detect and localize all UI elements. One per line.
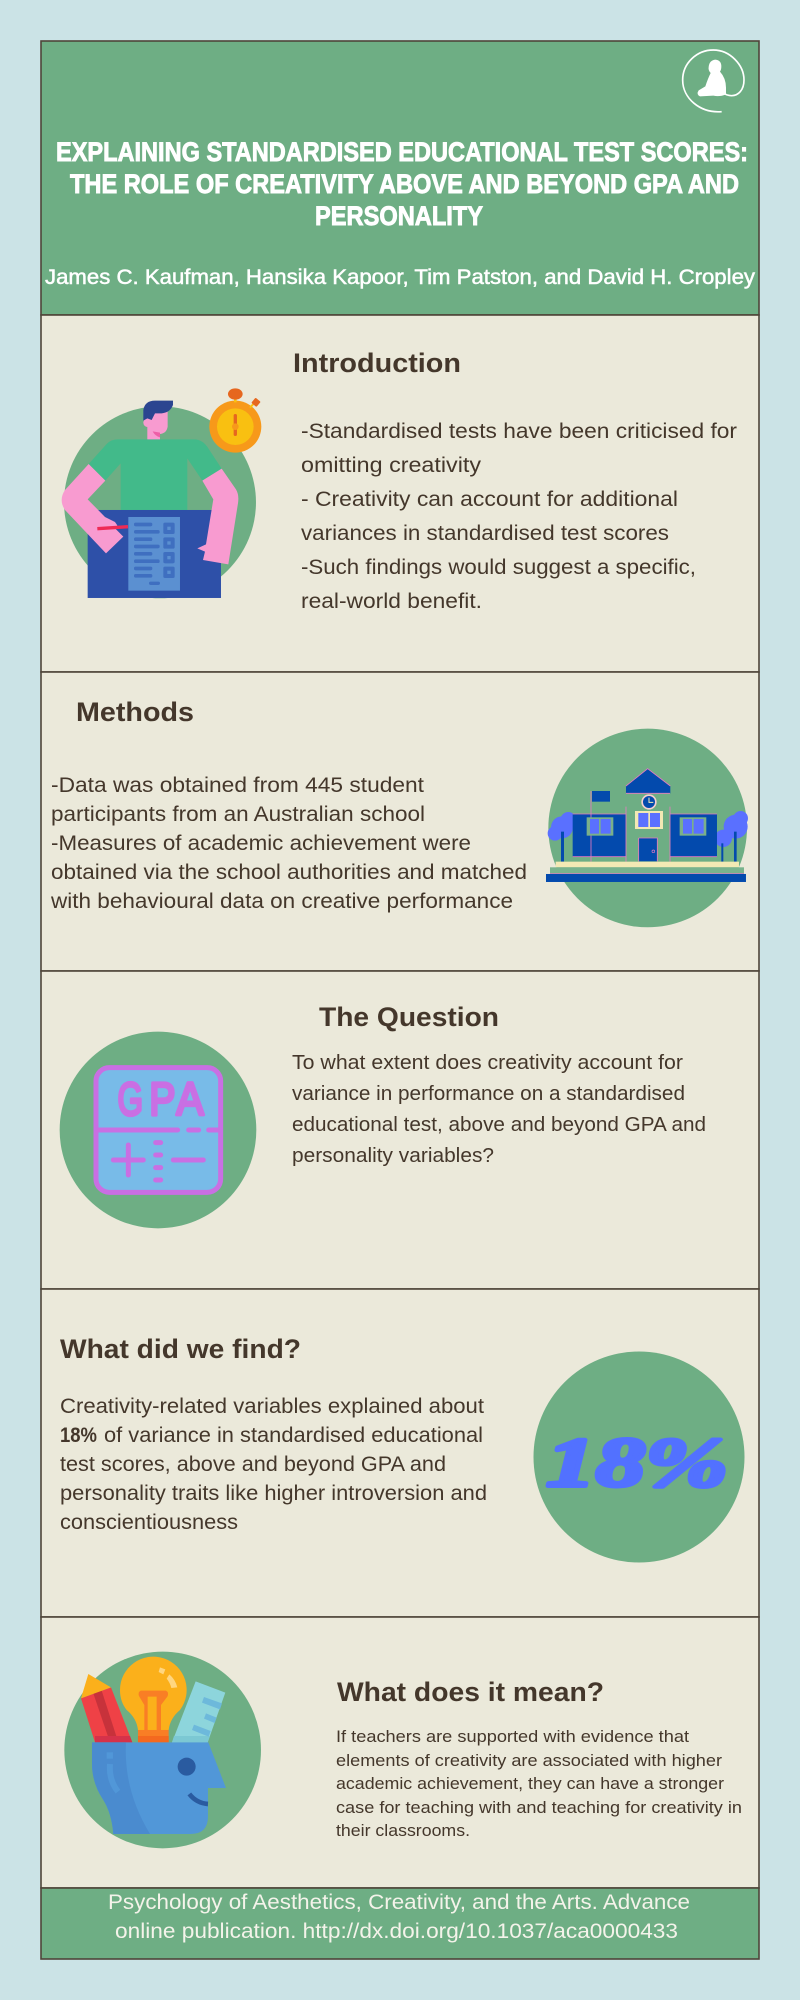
text block: methods: -Data was obtained from 445 student: [51, 774, 424, 797]
icon: school building: [546, 729, 748, 927]
text block: methods: with behavioural data on creative performance: [50, 890, 513, 913]
panel: the question: [41, 971, 759, 1289]
text block: implications: If teachers are supported with evidence that: [336, 1727, 689, 1746]
text block: findings: conscientiousness: [60, 1511, 238, 1534]
title: [56, 137, 748, 231]
panel: what does it mean: [41, 1617, 759, 1888]
text block: findings: of variance in standardised educational: [104, 1424, 483, 1447]
icon: GPA calculator: A: [176, 1073, 204, 1125]
text block: findings: 18%: [60, 1424, 97, 1447]
heading: what does it mean: What does it mean?: [337, 1677, 604, 1707]
text block: citation: [108, 1891, 690, 1943]
text block: introduction points: -Such findings would suggest a specific,: [301, 556, 696, 579]
text block: research question: educational test, above and beyond GPA and: [292, 1114, 706, 1136]
text block: implications: case for teaching with and teaching for creativity in: [336, 1798, 742, 1817]
authors: James C. Kaufman, Hansika Kapoor, Tim Patston, and David H. Cropley: [45, 266, 756, 289]
icon: GPA calculator: G: [118, 1073, 143, 1125]
icon: GPA calculator: P: [149, 1073, 175, 1125]
text block: citation: online publication. http://dx.doi.org/10.1037/aca0000433: [115, 1920, 678, 1943]
text block: citation: Psychology of Aesthetics, Creativity, and the Arts. Advance: [108, 1891, 690, 1914]
panel: header: [41, 41, 759, 315]
text block: methods: obtained via the school authorities and matched: [51, 861, 527, 884]
text block: methods: participants from an Australian school: [51, 803, 425, 826]
text block: research question: [292, 1052, 706, 1167]
text block: research question: personality variables?: [292, 1145, 494, 1167]
text block: implications: their classrooms.: [336, 1821, 470, 1840]
text block: findings: test scores, above and beyond GPA and: [60, 1453, 446, 1476]
panel: what did we find: [41, 1289, 759, 1617]
heading: methods: Methods: [76, 697, 194, 727]
callout: 18 percent: [534, 1352, 744, 1562]
text block: implications: [336, 1727, 742, 1840]
icon: person with test sheet and stopwatch: [62, 388, 261, 598]
title: PERSONALITY: [315, 201, 483, 231]
text block: research question: variance in performance on a standardised: [292, 1083, 685, 1105]
icon: GPA calculator: [60, 1032, 256, 1228]
text block: implications: academic achievement, they can have a stronger: [336, 1774, 724, 1793]
panel: introduction: [41, 315, 759, 672]
heading: what did we find: What did we find?: [60, 1334, 301, 1364]
text block: methods: -Measures of academic achievement were: [51, 832, 471, 855]
text block: introduction points: variances in standardised test scores: [301, 522, 669, 545]
text block: introduction points: real-world benefit.: [301, 590, 482, 613]
text block: introduction points: omitting creativity: [301, 454, 482, 477]
text block: implications: elements of creativity are associated with higher: [336, 1751, 722, 1770]
heading: the question: The Question: [319, 1002, 499, 1032]
text block: findings: [60, 1395, 487, 1534]
panel: citation footer: [41, 1888, 759, 1959]
text block: findings: Creativity-related variables explained about: [60, 1395, 484, 1418]
icon: head with pencil, bulb and ruler: [64, 1652, 261, 1848]
text block: introduction points: [301, 420, 737, 613]
text block: findings: personality traits like higher introversion and: [60, 1482, 487, 1505]
text block: introduction points: -Standardised tests have been criticised for: [301, 420, 737, 443]
callout: 18 percent: 18%: [546, 1425, 728, 1502]
text block: introduction points: - Creativity can account for additional: [301, 488, 678, 511]
icon: meditating figure logo: [683, 50, 744, 112]
panel: methods: [41, 672, 759, 971]
text block: research question: To what extent does creativity account for: [292, 1052, 683, 1074]
text block: methods: [50, 774, 527, 913]
heading: introduction: Introduction: [293, 348, 461, 378]
